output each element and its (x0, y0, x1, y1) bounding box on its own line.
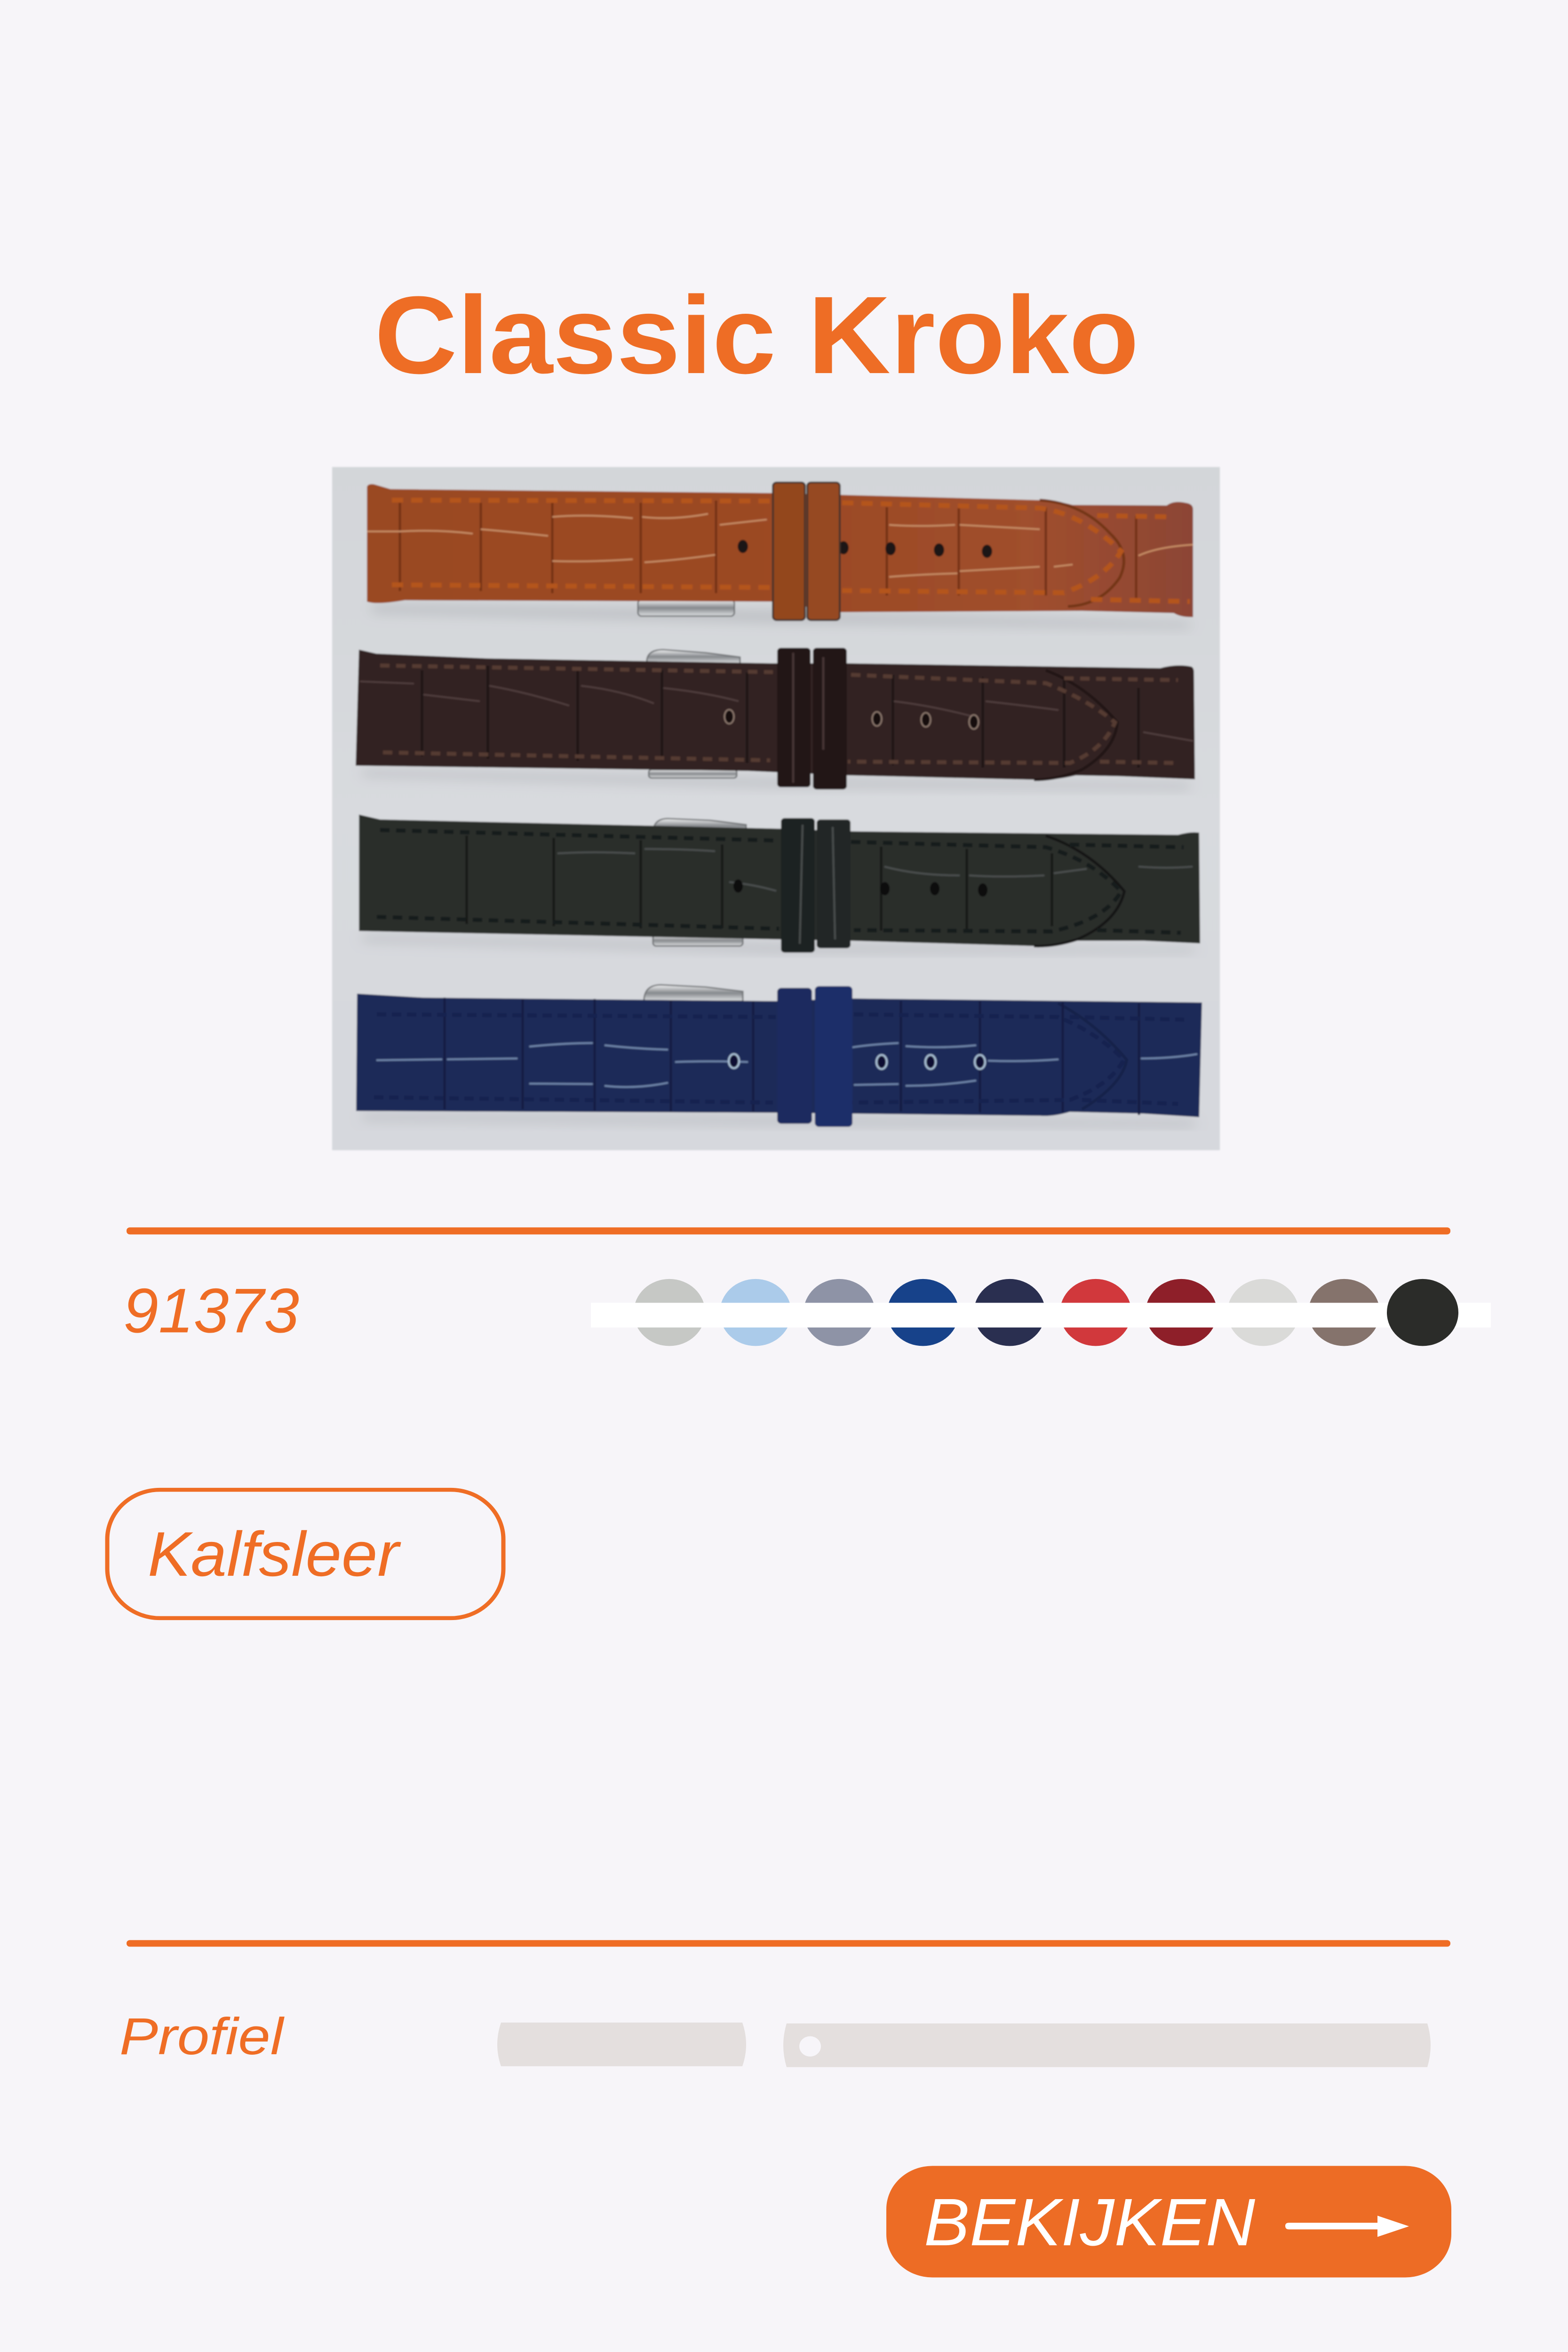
profile shape: strap side view with hole (783, 2024, 1431, 2067)
product photo: four crocodile-grain watch straps (332, 467, 1220, 1150)
strap: navy blue (356, 985, 1202, 1127)
button: Bekijken: BEKIJKEN (924, 2185, 1256, 2260)
strap: dark brown (356, 648, 1195, 789)
button: Bekijken (886, 2166, 1451, 2278)
material tag: Kalfsleer (107, 1490, 503, 1618)
profile shape: cross-section left (497, 2023, 746, 2066)
colour swatches (591, 1279, 1491, 1346)
strap: cognac brown (367, 483, 1193, 620)
divider top (127, 1227, 1450, 1234)
profile label: Profiel (119, 2008, 285, 2066)
divider bottom (127, 1940, 1450, 1947)
strap: black (359, 815, 1200, 953)
material tag: Kalfsleer: Kalfsleer (148, 1519, 401, 1589)
article number: 91373 (123, 1276, 299, 1346)
icon: arrow (1285, 2216, 1409, 2237)
title: Classic Kroko (374, 274, 1139, 397)
